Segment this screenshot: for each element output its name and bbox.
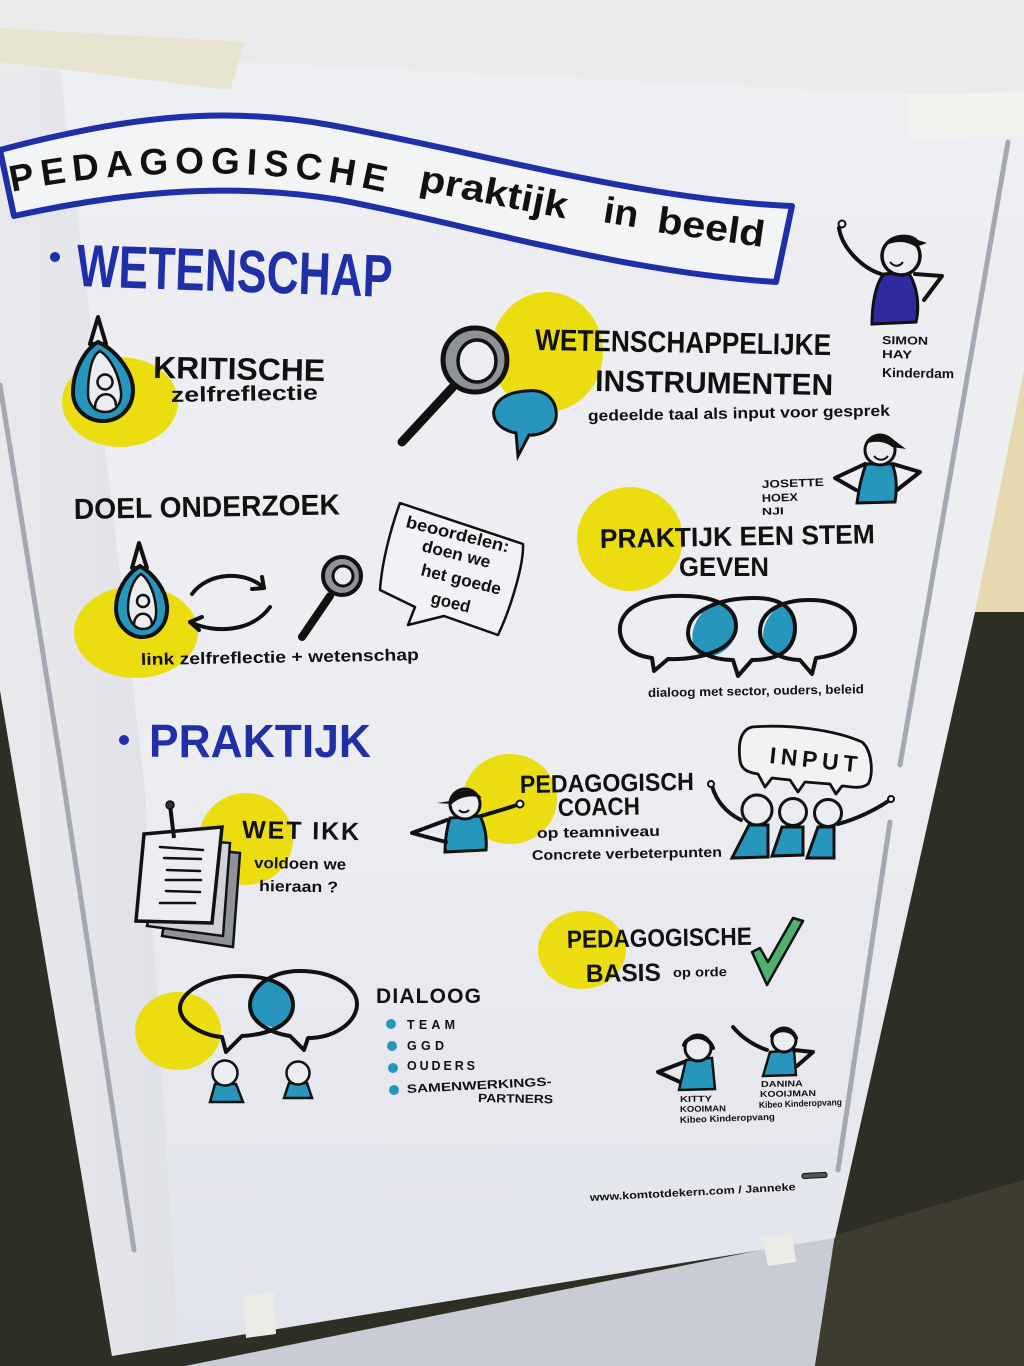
yellow blob xyxy=(62,357,178,447)
title text: in xyxy=(601,189,642,235)
item: wet ikk: voldoen we xyxy=(254,855,347,874)
item: kritische zelfreflectie: zelfreflectie xyxy=(171,381,318,407)
person: Simon Hay xyxy=(838,220,954,381)
person: Josette Hoex xyxy=(762,435,920,518)
icon: mirror drop xyxy=(73,317,133,421)
person: Simon Hay: Kinderdam xyxy=(882,365,954,381)
icon: coach figure xyxy=(412,789,524,852)
item: dialoog: DIALOOG xyxy=(376,985,481,1008)
heading: praktijk: PRAKTIJK xyxy=(149,715,371,767)
icon: documents xyxy=(136,801,240,947)
item: wetenschappelijke instrumenten: WETENSCHAPPELIJKE xyxy=(535,324,831,362)
item: input group xyxy=(708,726,894,858)
item: pedagogische basis: BASIS xyxy=(586,959,661,988)
person: Josette Hoex: HOEX xyxy=(762,492,799,505)
speech bubble: input: INPUT xyxy=(768,742,859,777)
item: wet ikk xyxy=(136,793,359,947)
item: wetenschappelijke instrumenten: INSTRUMENTEN xyxy=(595,365,833,402)
item: wet ikk: WET IKK xyxy=(242,816,359,846)
grey edge lines xyxy=(0,142,1008,1250)
item: wet ikk: hieraan ? xyxy=(259,878,338,896)
title text: beeld xyxy=(655,199,768,255)
item: praktijk een stem geven xyxy=(577,487,875,700)
website credit: www.komtotdekern.com / Janneke xyxy=(588,1181,796,1204)
title text: praktijk xyxy=(416,158,572,227)
heading: wetenschap xyxy=(50,232,394,310)
speech bubble: beoordelen xyxy=(380,503,523,635)
item: pedagogisch coach xyxy=(412,754,722,863)
person: Danina Kooijman: KOOIJMAN xyxy=(760,1088,816,1099)
item: doel onderzoek: link zelfreflectie + wetenschap xyxy=(141,646,419,669)
person: Josette Hoex: NJI xyxy=(762,506,784,518)
item: pedagogisch coach: PEDAGOGISCH xyxy=(520,768,694,799)
item: praktijk een stem geven: PRAKTIJK EEN STEM xyxy=(600,519,875,554)
title text xyxy=(10,148,768,255)
bullet list: GGD xyxy=(407,1039,444,1053)
icon: mirror drop small xyxy=(116,543,167,637)
person: Kitty Kooiman: Kibeo Kinderopvang xyxy=(680,1112,775,1125)
item: pedagogische basis: PEDAGOGISCHE xyxy=(567,923,752,954)
item: kritische zelfreflectie xyxy=(62,317,325,447)
person: Simon Hay: SIMON xyxy=(882,335,928,348)
item: doel onderzoek xyxy=(74,489,523,678)
icon: magnifier xyxy=(402,328,507,442)
item: kritische zelfreflectie: KRITISCHE xyxy=(153,350,325,388)
speech bubble: beoordelen: het goede xyxy=(419,560,503,599)
person: Kitty Kooiman: KITTY xyxy=(680,1093,712,1104)
item: wetenschappelijke instrumenten: gedeelde taal als input voor gesprek xyxy=(588,403,890,425)
shaded left band of the sheet xyxy=(0,70,178,1356)
website credit xyxy=(588,1172,827,1204)
title banner xyxy=(0,112,795,285)
bullet list: OUDERS xyxy=(407,1059,475,1073)
icon: two persons xyxy=(210,1060,312,1102)
person: Danina Kooijman xyxy=(733,1027,842,1110)
person: Danina Kooijman: Kibeo Kinderopvang xyxy=(759,1097,842,1110)
speech bubble: beoordelen: doen we xyxy=(420,536,493,572)
bullet list: SAMENWERKINGS- xyxy=(406,1074,552,1096)
item: praktijk een stem geven: GEVEN xyxy=(679,552,769,582)
icon: cycle arrows xyxy=(190,576,270,630)
person: Kitty Kooiman: KOOIMAN xyxy=(680,1103,726,1114)
item: doel onderzoek: DOEL ONDERZOEK xyxy=(74,489,340,526)
speech bubble: input xyxy=(739,726,871,794)
icon: three figures xyxy=(708,781,894,858)
title text: PEDAGOGISCHE xyxy=(10,148,388,192)
icon: speech bubble xyxy=(494,391,556,456)
speech bubble: beoordelen: beoordelen: xyxy=(404,512,511,557)
item: dialoog xyxy=(135,971,553,1106)
item: pedagogisch coach: COACH xyxy=(558,793,640,822)
icon: dialogue bubbles xyxy=(180,971,357,1052)
speech bubble: beoordelen: goed xyxy=(429,588,472,617)
person: Kitty Kooiman xyxy=(658,1035,775,1125)
item: pedagogische basis xyxy=(538,911,803,989)
icon: check mark xyxy=(752,918,803,985)
item: pedagogisch coach: op teamniveau xyxy=(537,824,660,842)
bullet list: PARTNERS xyxy=(478,1091,553,1106)
bullet list: TEAM xyxy=(407,1018,455,1032)
icon: magnifier small xyxy=(302,557,361,637)
person: Danina Kooijman: DANINA xyxy=(761,1078,803,1089)
item: pedagogische basis: op orde xyxy=(673,964,727,980)
item: wetenschappelijke instrumenten xyxy=(402,292,890,456)
item: pedagogisch coach: Concrete verbeterpunten xyxy=(532,844,722,863)
icon: overlapping speech bubbles xyxy=(620,596,855,676)
heading: wetenschap: WETENSCHAP xyxy=(76,232,394,310)
person: Josette Hoex: JOSETTE xyxy=(762,477,824,491)
person: Simon Hay: HAY xyxy=(882,349,913,362)
bullet list xyxy=(386,1018,553,1106)
item: praktijk een stem geven: dialoog met sector, ouders, beleid xyxy=(648,682,864,700)
